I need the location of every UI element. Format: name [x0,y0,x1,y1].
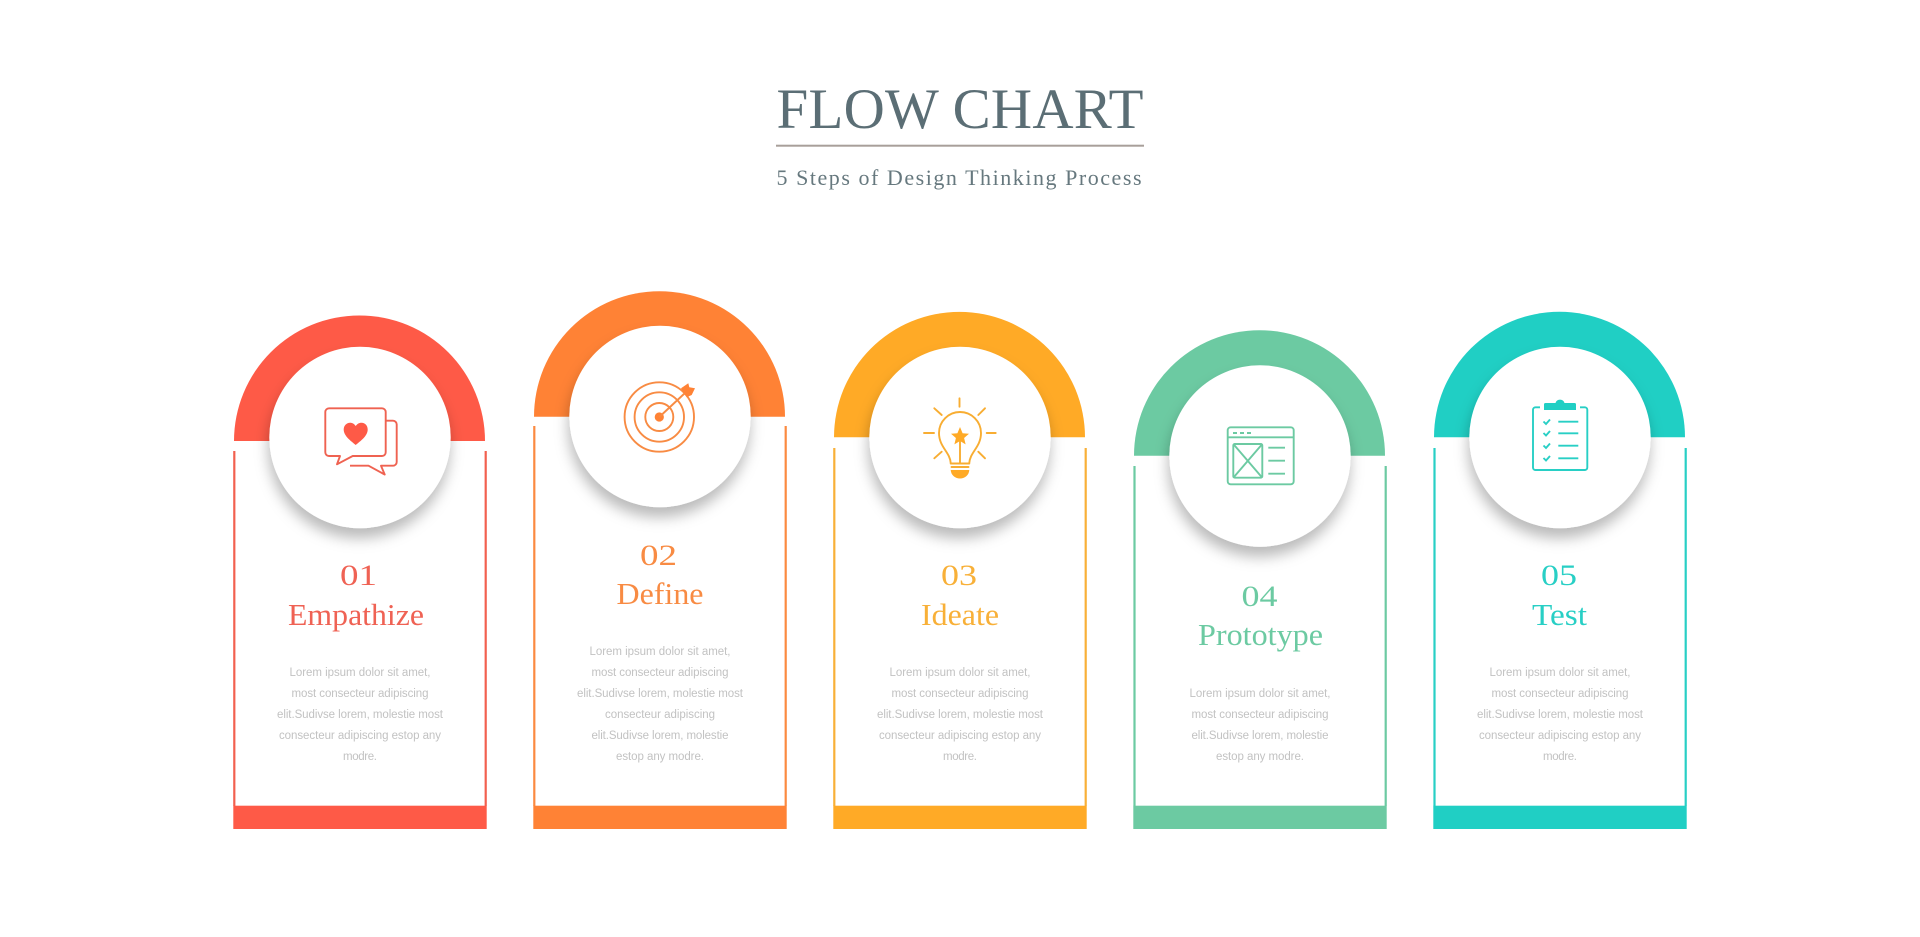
step label: Empathize [288,597,424,632]
panel: step 01 Empathize [233,316,487,829]
icon: target with arrow [625,382,695,452]
description: consecteur adipiscing estop any [279,730,441,742]
title block [776,78,1144,190]
step label: Prototype [1198,617,1323,652]
description: Lorem ipsum dolor sit amet, [890,667,1030,679]
description: Lorem ipsum dolor sit amet, [1190,688,1330,700]
description [277,667,444,763]
description: elit.Sudivse lorem, molestie most [277,709,444,721]
description: consecteur adipiscing [605,709,715,721]
title: FLOW CHART [776,78,1144,141]
description [1477,667,1644,763]
description: most consecteur adipiscing [592,667,728,679]
subtitle: 5 Steps of Design Thinking Process [776,165,1142,190]
panel: step 02 Define [533,291,787,829]
icon: chat bubbles with heart [325,408,397,474]
bottom bar [833,806,1087,829]
description: estop any modre. [1216,751,1304,763]
step number: 05 [1541,559,1577,592]
card side borders [1434,448,1686,806]
panel: step 04 Prototype [1133,330,1387,829]
description: consecteur adipiscing estop any [1479,730,1641,742]
icon circle [269,347,451,528]
description: Lorem ipsum dolor sit amet, [590,646,730,658]
icon circle [1169,365,1351,547]
description: most consecteur adipiscing [892,688,1028,700]
panel: step 03 Ideate [833,312,1087,829]
bottom bar [533,806,787,829]
arch header [234,316,485,441]
step label: Test [1532,597,1587,632]
description: most consecteur adipiscing [292,688,428,700]
card side borders [534,426,786,806]
bottom bar [1433,806,1687,829]
step number: 01 [340,559,377,592]
arch header [534,291,785,417]
description: modre. [343,751,377,763]
description: elit.Sudivse lorem, molestie [1192,730,1328,742]
description: elit.Sudivse lorem, molestie most [877,709,1044,721]
panel: step 05 Test [1433,312,1687,829]
arch header [1134,330,1385,456]
icon circle [569,326,751,507]
description [577,646,744,763]
description: estop any modre. [616,751,704,763]
arch header [834,312,1085,437]
arch header [1434,312,1685,437]
card side borders [834,448,1086,806]
card side borders [1134,466,1386,806]
icon: light bulb with star [924,398,996,478]
description: elit.Sudivse lorem, molestie most [1477,709,1644,721]
step number: 03 [941,559,977,592]
description: modre. [1543,751,1577,763]
description: modre. [943,751,977,763]
step number: 02 [640,539,677,572]
icon: wireframe window [1228,427,1294,484]
description: Lorem ipsum dolor sit amet, [290,667,430,679]
description [1190,688,1330,763]
description: Lorem ipsum dolor sit amet, [1490,667,1630,679]
card side borders [234,451,486,806]
description: most consecteur adipiscing [1192,709,1328,721]
icon circle [1469,347,1651,528]
step label: Ideate [921,597,999,632]
description: most consecteur adipiscing [1492,688,1628,700]
description [877,667,1044,763]
description: elit.Sudivse lorem, molestie [592,730,728,742]
title rule [776,145,1144,147]
icon circle [869,347,1051,528]
bottom bar [233,806,487,829]
description: consecteur adipiscing estop any [879,730,1041,742]
icon: clipboard checklist [1533,400,1587,470]
bottom bar [1133,806,1387,829]
description: elit.Sudivse lorem, molestie most [577,688,744,700]
step label: Define [616,576,704,611]
step number: 04 [1242,580,1278,613]
